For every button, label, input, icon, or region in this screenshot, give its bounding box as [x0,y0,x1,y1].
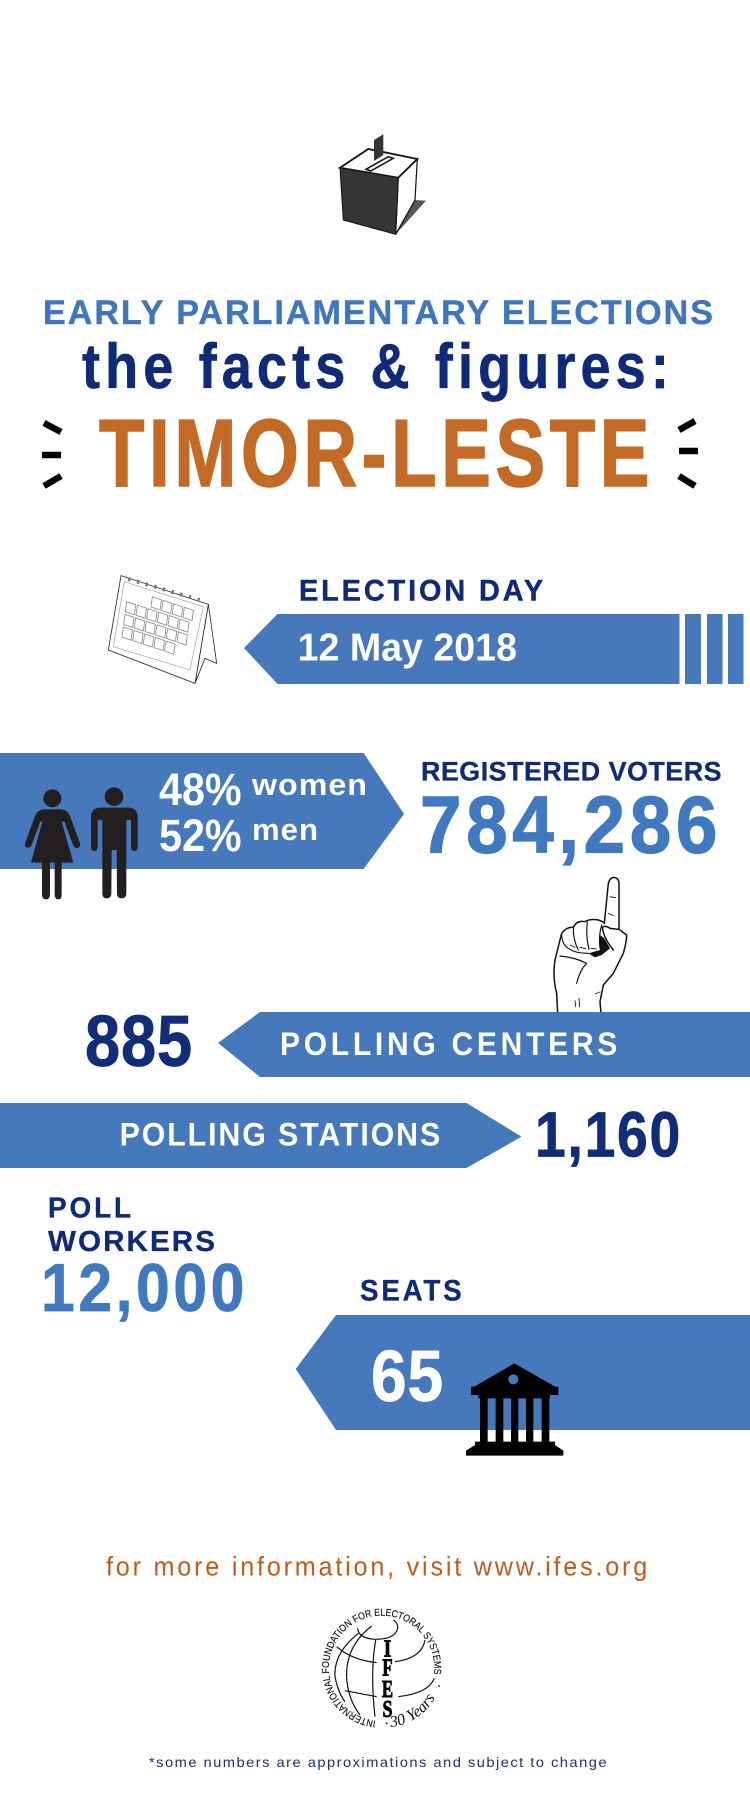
logo: IFES globe: S [382,1696,393,1723]
label: poll workers: POLL [48,1193,134,1225]
logo: IFES globe: INTERNATIONAL FOUNDATION FOR ELECTORAL SYSTEMS [322,1608,442,1728]
panel: voter gender arrow band [0,753,404,869]
text: more information link: for more information, visit www.ifes.org [106,1552,650,1582]
icon: parliament building [466,1363,563,1456]
number: polling stations: 1,160 [535,1099,682,1171]
label: polling centers: POLLING CENTERS [280,1026,621,1062]
text: men share [159,810,319,861]
panel: polling stations arrow band [0,1103,522,1168]
label: election day: ELECTION DAY [299,575,546,608]
label: registered voters: REGISTERED VOTERS [421,757,722,787]
text: election date: 12 May 2018 [298,627,517,670]
text: men share: 52% [159,810,242,861]
number: polling centers: 885 [85,1002,193,1082]
icon: raised inked finger hand [554,877,627,1013]
label: polling stations: POLLING STATIONS [120,1117,442,1153]
icon: man [91,787,138,898]
icon: desk calendar [108,576,217,683]
label: poll workers: WORKERS [48,1226,217,1258]
heading: early parliamentary elections: EARLY PARLIAMENTARY ELECTIONS [43,294,715,332]
number: poll workers: 12,000 [41,1250,248,1326]
text: women share: 48% [159,764,242,815]
number: registered voters: 784,286 [420,781,722,871]
icon: woman [25,789,80,899]
panel: polling centers arrow band [218,1012,750,1077]
text: women share: women [251,767,368,802]
icon: ballot box [340,134,426,234]
text: women share [159,764,368,815]
label: poll workers [48,1193,217,1258]
panel: election day arrow band [244,614,744,684]
logo: IFES globe: I [384,1636,391,1662]
logo: IFES globe: 30 Years [390,1694,434,1727]
text: men share: men [252,812,319,847]
logo: IFES globe: F [382,1656,393,1681]
label: seats: SEATS [360,1275,464,1308]
icon: left emphasis ticks [42,423,61,486]
text: footnote: *some numbers are approximations and subject to change [149,1754,608,1770]
panel: seats arrow band [296,1315,750,1430]
icon: right emphasis ticks [679,421,698,486]
number: seats: 65 [371,1337,444,1417]
logo: IFES globe: E [382,1677,393,1703]
